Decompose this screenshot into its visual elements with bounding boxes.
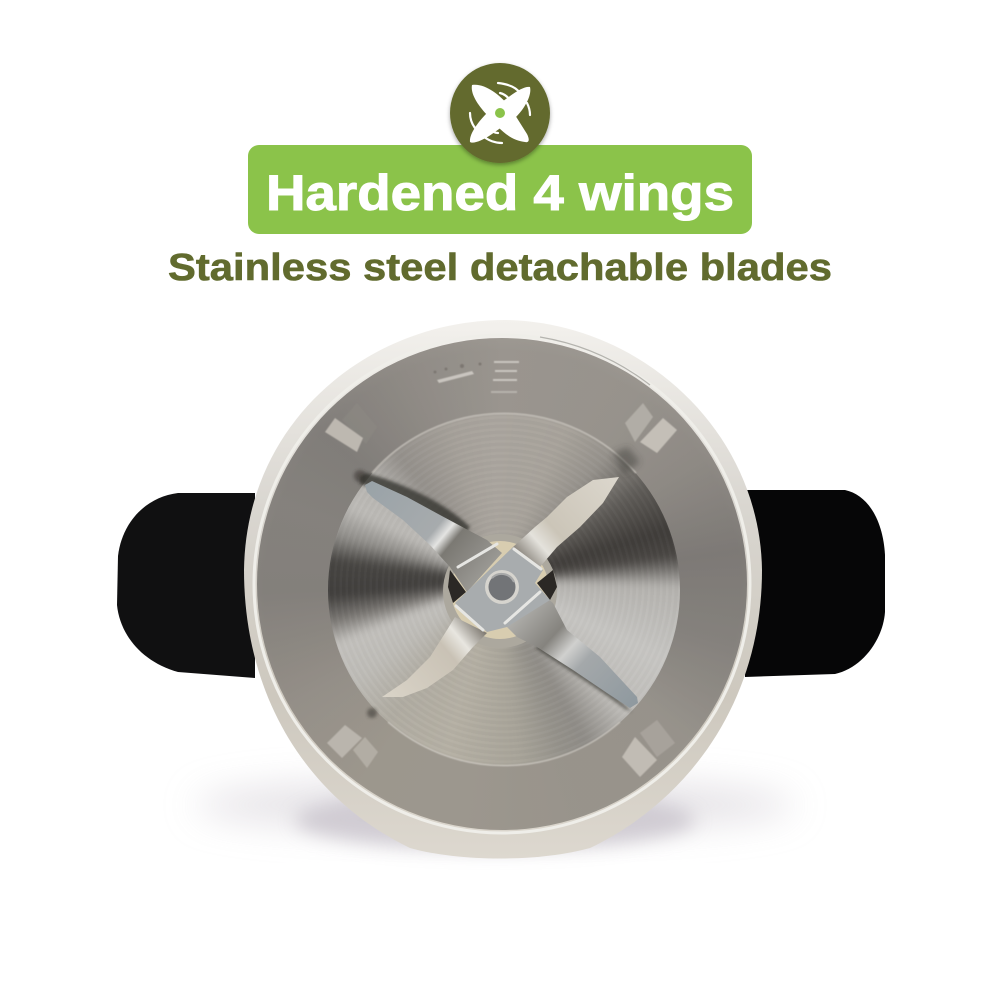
wall markings [434,361,519,393]
center bolt [485,570,519,604]
title: Hardened 4 wings [266,165,734,221]
bowl outer rim [244,320,762,858]
right handle [745,490,885,677]
wall shading [257,338,747,830]
blade: upper right [513,477,619,567]
blade shadows [360,473,632,712]
lug: upper right [613,403,677,475]
plate highlights [456,544,541,630]
heading badge [248,145,752,234]
bowl floor [328,414,680,765]
brushed steel sweep [318,404,690,776]
lug: lower right [622,720,675,777]
lug: lower left [327,708,378,768]
center plate [455,547,550,632]
floor edge highlights [372,413,636,766]
hub dark openings [448,570,466,603]
hub well [443,534,557,648]
concentric brushing [328,414,680,766]
icon: crossed blades [448,62,552,168]
lug: upper left [325,403,377,482]
bowl inner wall [257,338,747,830]
left handle [117,493,255,678]
blade: lower right [503,590,638,708]
blade: upper left [365,481,502,592]
subtitle: Stainless steel detachable blades [168,247,832,289]
blade: lower left [382,617,487,697]
